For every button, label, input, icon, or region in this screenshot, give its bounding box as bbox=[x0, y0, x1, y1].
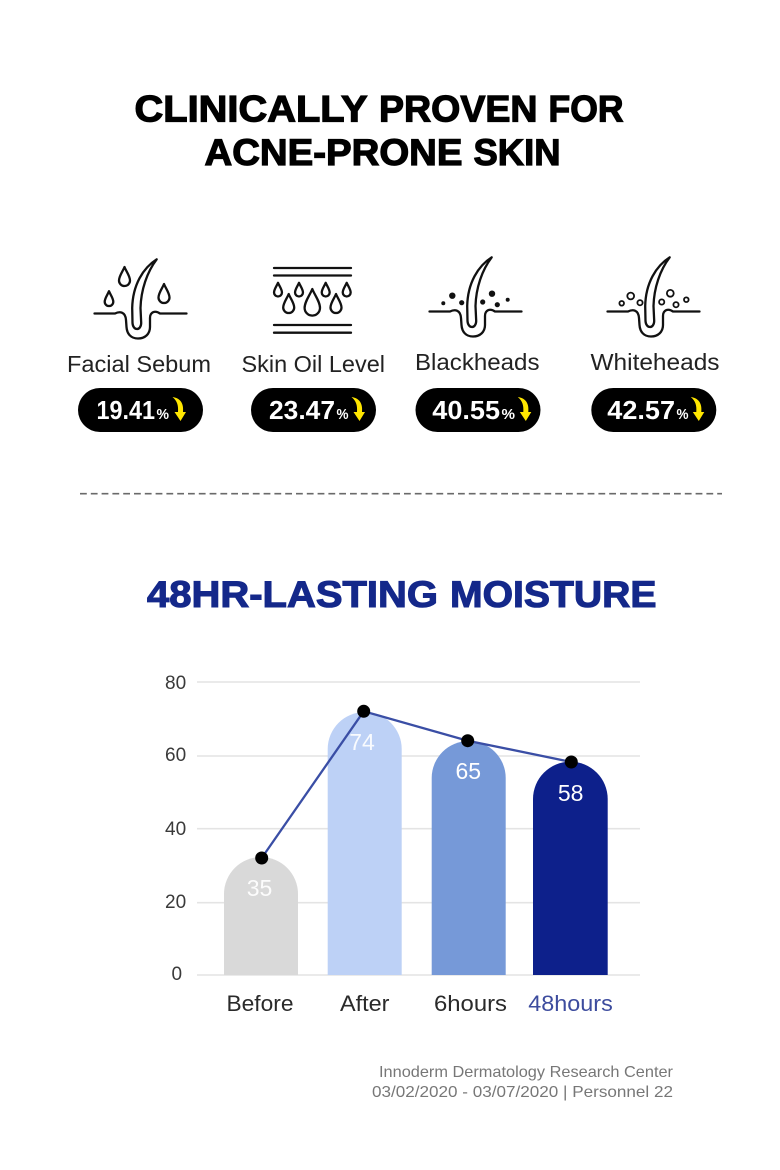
source note: 03/02/2020 - 03/07/2020 | Personnel 22 bbox=[372, 1084, 673, 1101]
bar values: 65 bbox=[456, 758, 481, 784]
badge: 42.57% decrease: 42.57 bbox=[607, 395, 675, 425]
label: skin oil level: Skin Oil Level bbox=[242, 351, 385, 377]
x axis labels: 48hours bbox=[528, 991, 613, 1016]
bar: after bbox=[328, 712, 402, 975]
badge: 42.57% decrease bbox=[591, 388, 716, 432]
badge: 42.57% decrease: % bbox=[676, 406, 688, 423]
title: SKIN bbox=[474, 132, 560, 173]
bar: 6 hours bbox=[432, 741, 506, 975]
heading: 48hr-lasting moisture bbox=[147, 574, 656, 615]
heading: 48hr-lasting moisture: MOISTURE bbox=[450, 574, 656, 615]
title: PROVEN bbox=[379, 89, 538, 130]
panel: blackheads bbox=[415, 257, 540, 432]
title: CLINICALLY bbox=[134, 89, 368, 130]
panel: skin oil level bbox=[242, 268, 385, 432]
bar values: 74 bbox=[349, 729, 375, 755]
label: facial sebum: Facial Sebum bbox=[67, 351, 211, 377]
icon: skin layers with oil drops bbox=[274, 268, 351, 333]
badge: 40.55% decrease: % bbox=[502, 406, 515, 423]
bar: 48 hours bbox=[533, 762, 608, 975]
badge: 23.47% decrease: % bbox=[336, 406, 348, 423]
source note bbox=[372, 1064, 674, 1101]
label: blackheads: Blackheads bbox=[415, 349, 540, 375]
icon: hair follicle with hollow dots bbox=[608, 257, 700, 336]
icon: hair follicle with black dots bbox=[430, 257, 522, 336]
y axis labels: 20 bbox=[165, 892, 186, 913]
bar: before bbox=[224, 857, 298, 975]
bar values bbox=[247, 729, 583, 901]
panel: facial sebum bbox=[67, 259, 211, 432]
y axis labels: 0 bbox=[172, 964, 182, 985]
y axis labels: 80 bbox=[165, 673, 186, 694]
trend line bbox=[255, 705, 578, 864]
bar values: 58 bbox=[558, 780, 583, 806]
x axis labels bbox=[226, 991, 613, 1016]
icon: hair follicle with oil drops bbox=[94, 259, 186, 338]
title bbox=[134, 89, 624, 173]
badge: 23.47% decrease: 23.47 bbox=[269, 395, 335, 425]
heading: 48hr-lasting moisture: 48HR-LASTING bbox=[147, 574, 438, 615]
x axis labels: 6hours bbox=[434, 991, 507, 1016]
badge: 19.41% decrease bbox=[78, 388, 203, 432]
panel: whiteheads bbox=[590, 257, 720, 432]
x axis labels: Before bbox=[226, 991, 294, 1016]
label: whiteheads: Whiteheads bbox=[590, 349, 720, 375]
badge: 19.41% decrease: % bbox=[156, 406, 169, 423]
y axis labels bbox=[165, 673, 186, 985]
badge: 40.55% decrease: 40.55 bbox=[432, 395, 500, 425]
x axis labels: After bbox=[340, 991, 390, 1016]
y axis labels: 60 bbox=[165, 745, 186, 766]
badge: 40.55% decrease bbox=[416, 388, 540, 432]
badge: 23.47% decrease bbox=[251, 388, 376, 432]
badge: 19.41% decrease: 19.41 bbox=[96, 395, 155, 425]
title: FOR bbox=[548, 89, 624, 130]
bar values: 35 bbox=[247, 875, 272, 901]
title: ACNE-PRONE bbox=[204, 132, 462, 173]
bar chart: moisture over time bbox=[165, 673, 640, 1016]
source note: Innoderm Dermatology Research Center bbox=[379, 1064, 674, 1081]
y axis labels: 40 bbox=[165, 819, 186, 840]
